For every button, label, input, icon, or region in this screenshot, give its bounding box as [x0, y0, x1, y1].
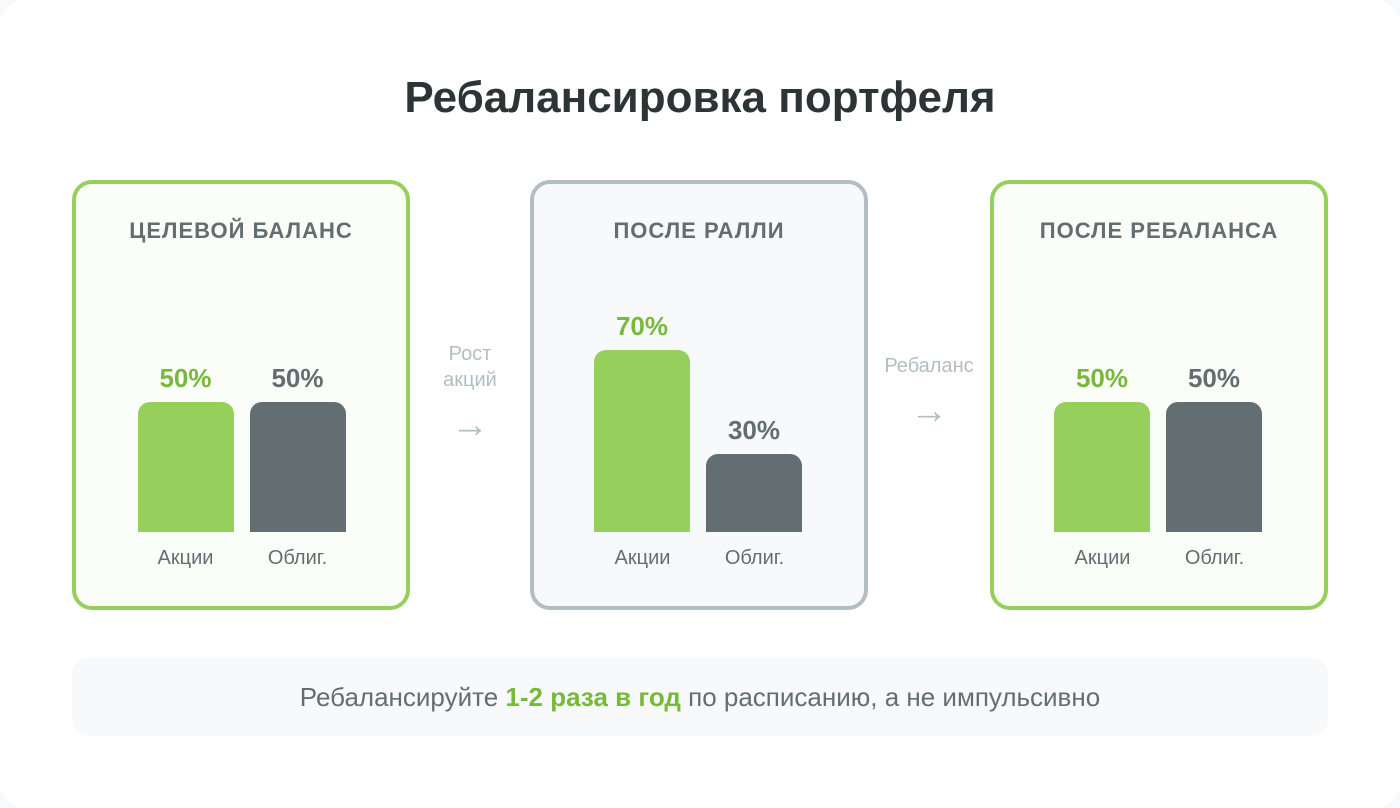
arrow label: stock growth: Рост [449, 343, 491, 365]
value: bonds 30%: 30% [728, 415, 780, 445]
label: bonds: Облиг. [268, 547, 327, 569]
label: stocks: Акции [615, 547, 670, 569]
panel heading: ЦЕЛЕВОЙ БАЛАНС [129, 218, 353, 243]
panel: target balance [72, 180, 410, 610]
arrow: to after rally: → [451, 404, 489, 446]
bar: bonds [706, 454, 802, 532]
label: stocks: Акции [158, 547, 213, 569]
panel: after rebalance [990, 180, 1328, 610]
label: bonds: Облиг. [725, 547, 784, 569]
value: bonds 50%: 50% [1188, 363, 1240, 393]
bar: bonds [1166, 402, 1262, 532]
value: bonds 50%: 50% [271, 363, 324, 393]
title: Ребалансировка портфеля [404, 73, 996, 122]
arrow label: stock growth [443, 343, 497, 391]
value: stocks 70%: 70% [616, 311, 668, 341]
value: stocks 50%: 50% [1076, 363, 1128, 393]
bar: stocks [1054, 402, 1150, 532]
label: stocks: Акции [1075, 547, 1130, 569]
panel heading: ПОСЛЕ РАЛЛИ [613, 218, 785, 243]
value: stocks 50%: 50% [159, 363, 212, 393]
bar: stocks [594, 350, 690, 532]
arrow: to after rebalance: → [910, 390, 948, 432]
arrow label: stock growth: акций [443, 369, 497, 391]
panel: after rally [530, 180, 868, 610]
bar: bonds [250, 402, 346, 532]
bar: stocks [138, 402, 234, 532]
callout: recommendation: Ребалансируйте 1-2 раза в год по расписанию, а не импульсивно [300, 682, 1100, 712]
panel heading: ПОСЛЕ РЕБАЛАНСА [1040, 218, 1278, 243]
arrow label: rebalance: Ребаланс [884, 355, 974, 377]
callout: recommendation [72, 658, 1328, 736]
label: bonds: Облиг. [1185, 547, 1244, 569]
